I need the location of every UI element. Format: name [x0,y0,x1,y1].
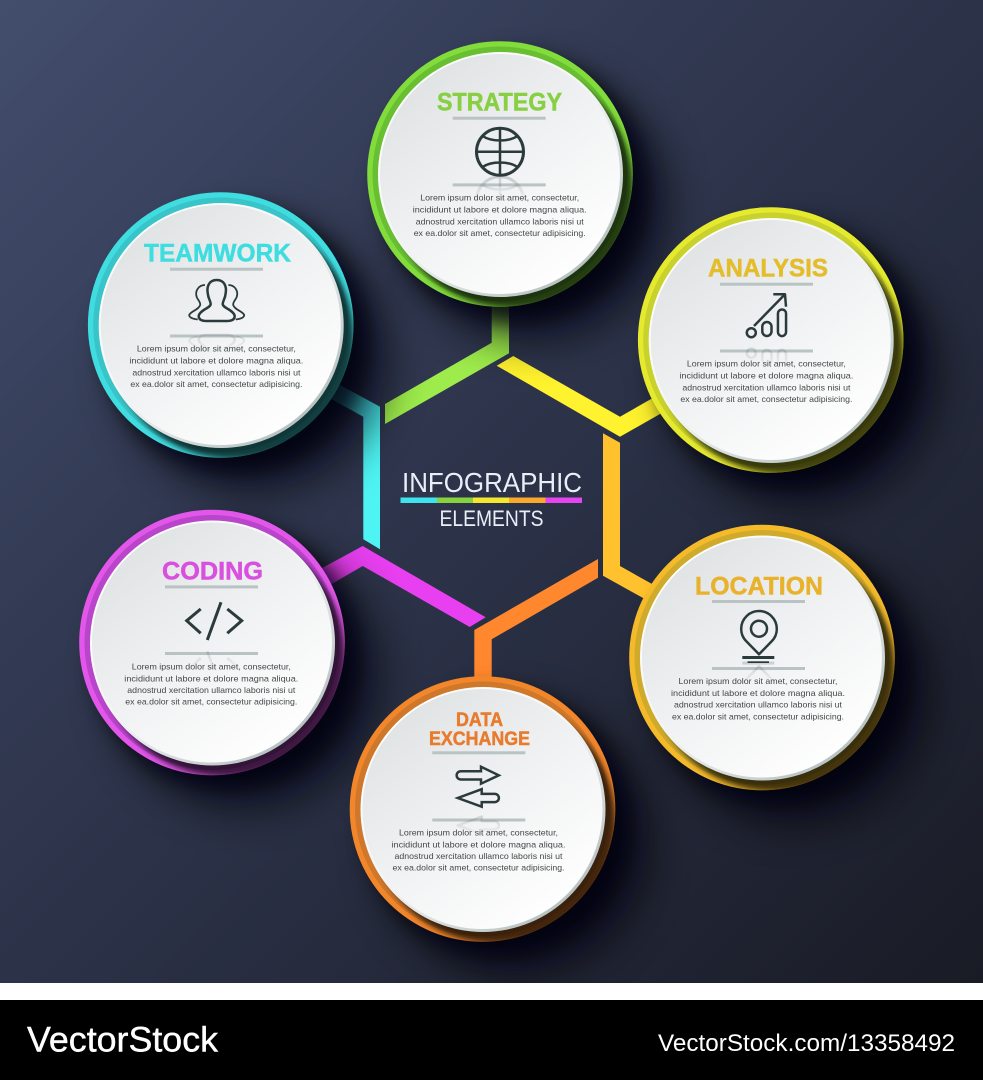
text block: Lorem ipsum dolor sit amet, consectetur, [687,359,846,369]
panel: coding [79,510,345,776]
text block: Lorem ipsum dolor sit amet, consectetur, [678,676,838,686]
text block: Lorem ipsum dolor sit amet, consectetur, [399,827,558,837]
divider lines [432,751,525,822]
panel: location [629,525,895,792]
text block: incididunt ut labore et dolore magna aliqua. [392,839,566,849]
icon: team [189,280,244,321]
text block: Lorem ipsum dolor sit amet, consectetur, [420,193,579,203]
hexagon connector: orange [474,559,598,690]
text block: incididunt ut labore et dolore magna aliqua. [129,356,303,366]
heading: LOCATION [695,572,823,600]
icon reflection [742,662,774,680]
ring: cyan [88,192,354,459]
icon reflection [746,348,788,363]
center title [400,467,582,531]
icon reflection [458,817,499,834]
panel: teamwork [88,192,354,459]
text block: adnostrud xercitation ullamco laboris nisi ut [394,851,563,861]
text block: Lorem ipsum dolor sit amet, consectetur, [137,344,296,354]
colour bar [400,498,582,503]
text block: incididunt ut labore et dolore magna aliqua. [679,371,853,381]
hexagon connector: yellow [497,356,670,437]
heading: DATA [456,709,503,731]
text block: incididunt ut labore et dolore magna aliqua. [413,205,587,215]
text block: incididunt ut labore et dolore magna aliqua. [124,673,298,683]
text block [129,344,303,389]
icon reflection [192,651,236,666]
ring: orange [350,676,616,943]
watermark: brand: VectorStock [27,1020,219,1060]
icon: globe [476,128,524,176]
icon: growth chart [747,294,786,337]
panel: strategy [367,41,633,308]
circle drop shadows: wide [111,73,936,974]
ring: yellow [638,207,904,474]
heading: ANALYSIS [708,255,828,283]
icon reflection [188,334,245,348]
divider lines [170,268,263,338]
text block: adnostrud xercitation ullamco laboris nisi ut [127,685,296,695]
divider lines [453,117,546,186]
text block [392,827,566,873]
text block: ex ea.dolor sit amet, consectetur adipisicing. [130,379,302,389]
text block [124,661,298,707]
hexagon connector: magenta [315,546,486,627]
text block [671,676,845,721]
text block: ex ea.dolor sit amet, consectetur adipisicing. [414,228,586,238]
panel: data exchange [350,676,616,943]
text block: Lorem ipsum dolor sit amet, consectetur, [132,661,291,671]
hexagon connector: cyan [325,380,380,549]
icon: exchange arrows [457,767,499,807]
divider lines [712,600,805,670]
text block: ex ea.dolor sit amet, consectetur adipisicing. [125,697,297,707]
heading [429,709,530,750]
text block: ex ea.dolor sit amet, consectetur adipisicing. [680,394,852,404]
subtitle: elements: ELEMENTS [440,506,544,531]
hexagon connector: green [385,290,509,424]
text block: adnostrud xercitation ullamco laboris nisi ut [132,367,301,377]
divider lines [720,283,813,352]
footer strip [0,983,983,1000]
text block: ex ea.dolor sit amet, consectetur adipisicing. [672,711,844,721]
divider lines [165,585,258,655]
icon reflection [476,176,524,197]
icon: map pin [741,611,777,663]
heading: TEAMWORK [144,240,291,268]
text block: adnostrud xercitation ullamco laboris nisi ut [416,216,584,226]
icon: code brackets [187,602,242,640]
heading: STRATEGY [437,88,562,116]
ring: magenta [79,510,345,776]
text block: ex ea.dolor sit amet, consectetur adipisicing. [392,863,565,873]
title: infographic: INFOGRAPHIC [402,467,582,498]
footer bar [0,1000,983,1080]
heading: CODING [162,558,263,586]
text block: adnostrud xercitation ullamco laboris nisi ut [682,382,851,392]
text block [413,193,587,238]
heading: EXCHANGE [429,728,530,750]
text block [679,359,853,404]
text block: adnostrud xercitation ullamco laboris nisi ut [674,700,843,710]
ring: amber [629,525,895,792]
panel: analysis [638,207,904,474]
hexagon connector: amber [603,433,660,598]
watermark: url: VectorStock.com/13358492 [658,1030,955,1057]
ring: green [367,41,633,308]
circle drop shadows: tight [93,55,918,956]
text block: incididunt ut labore et dolore magna aliqua. [671,688,845,698]
